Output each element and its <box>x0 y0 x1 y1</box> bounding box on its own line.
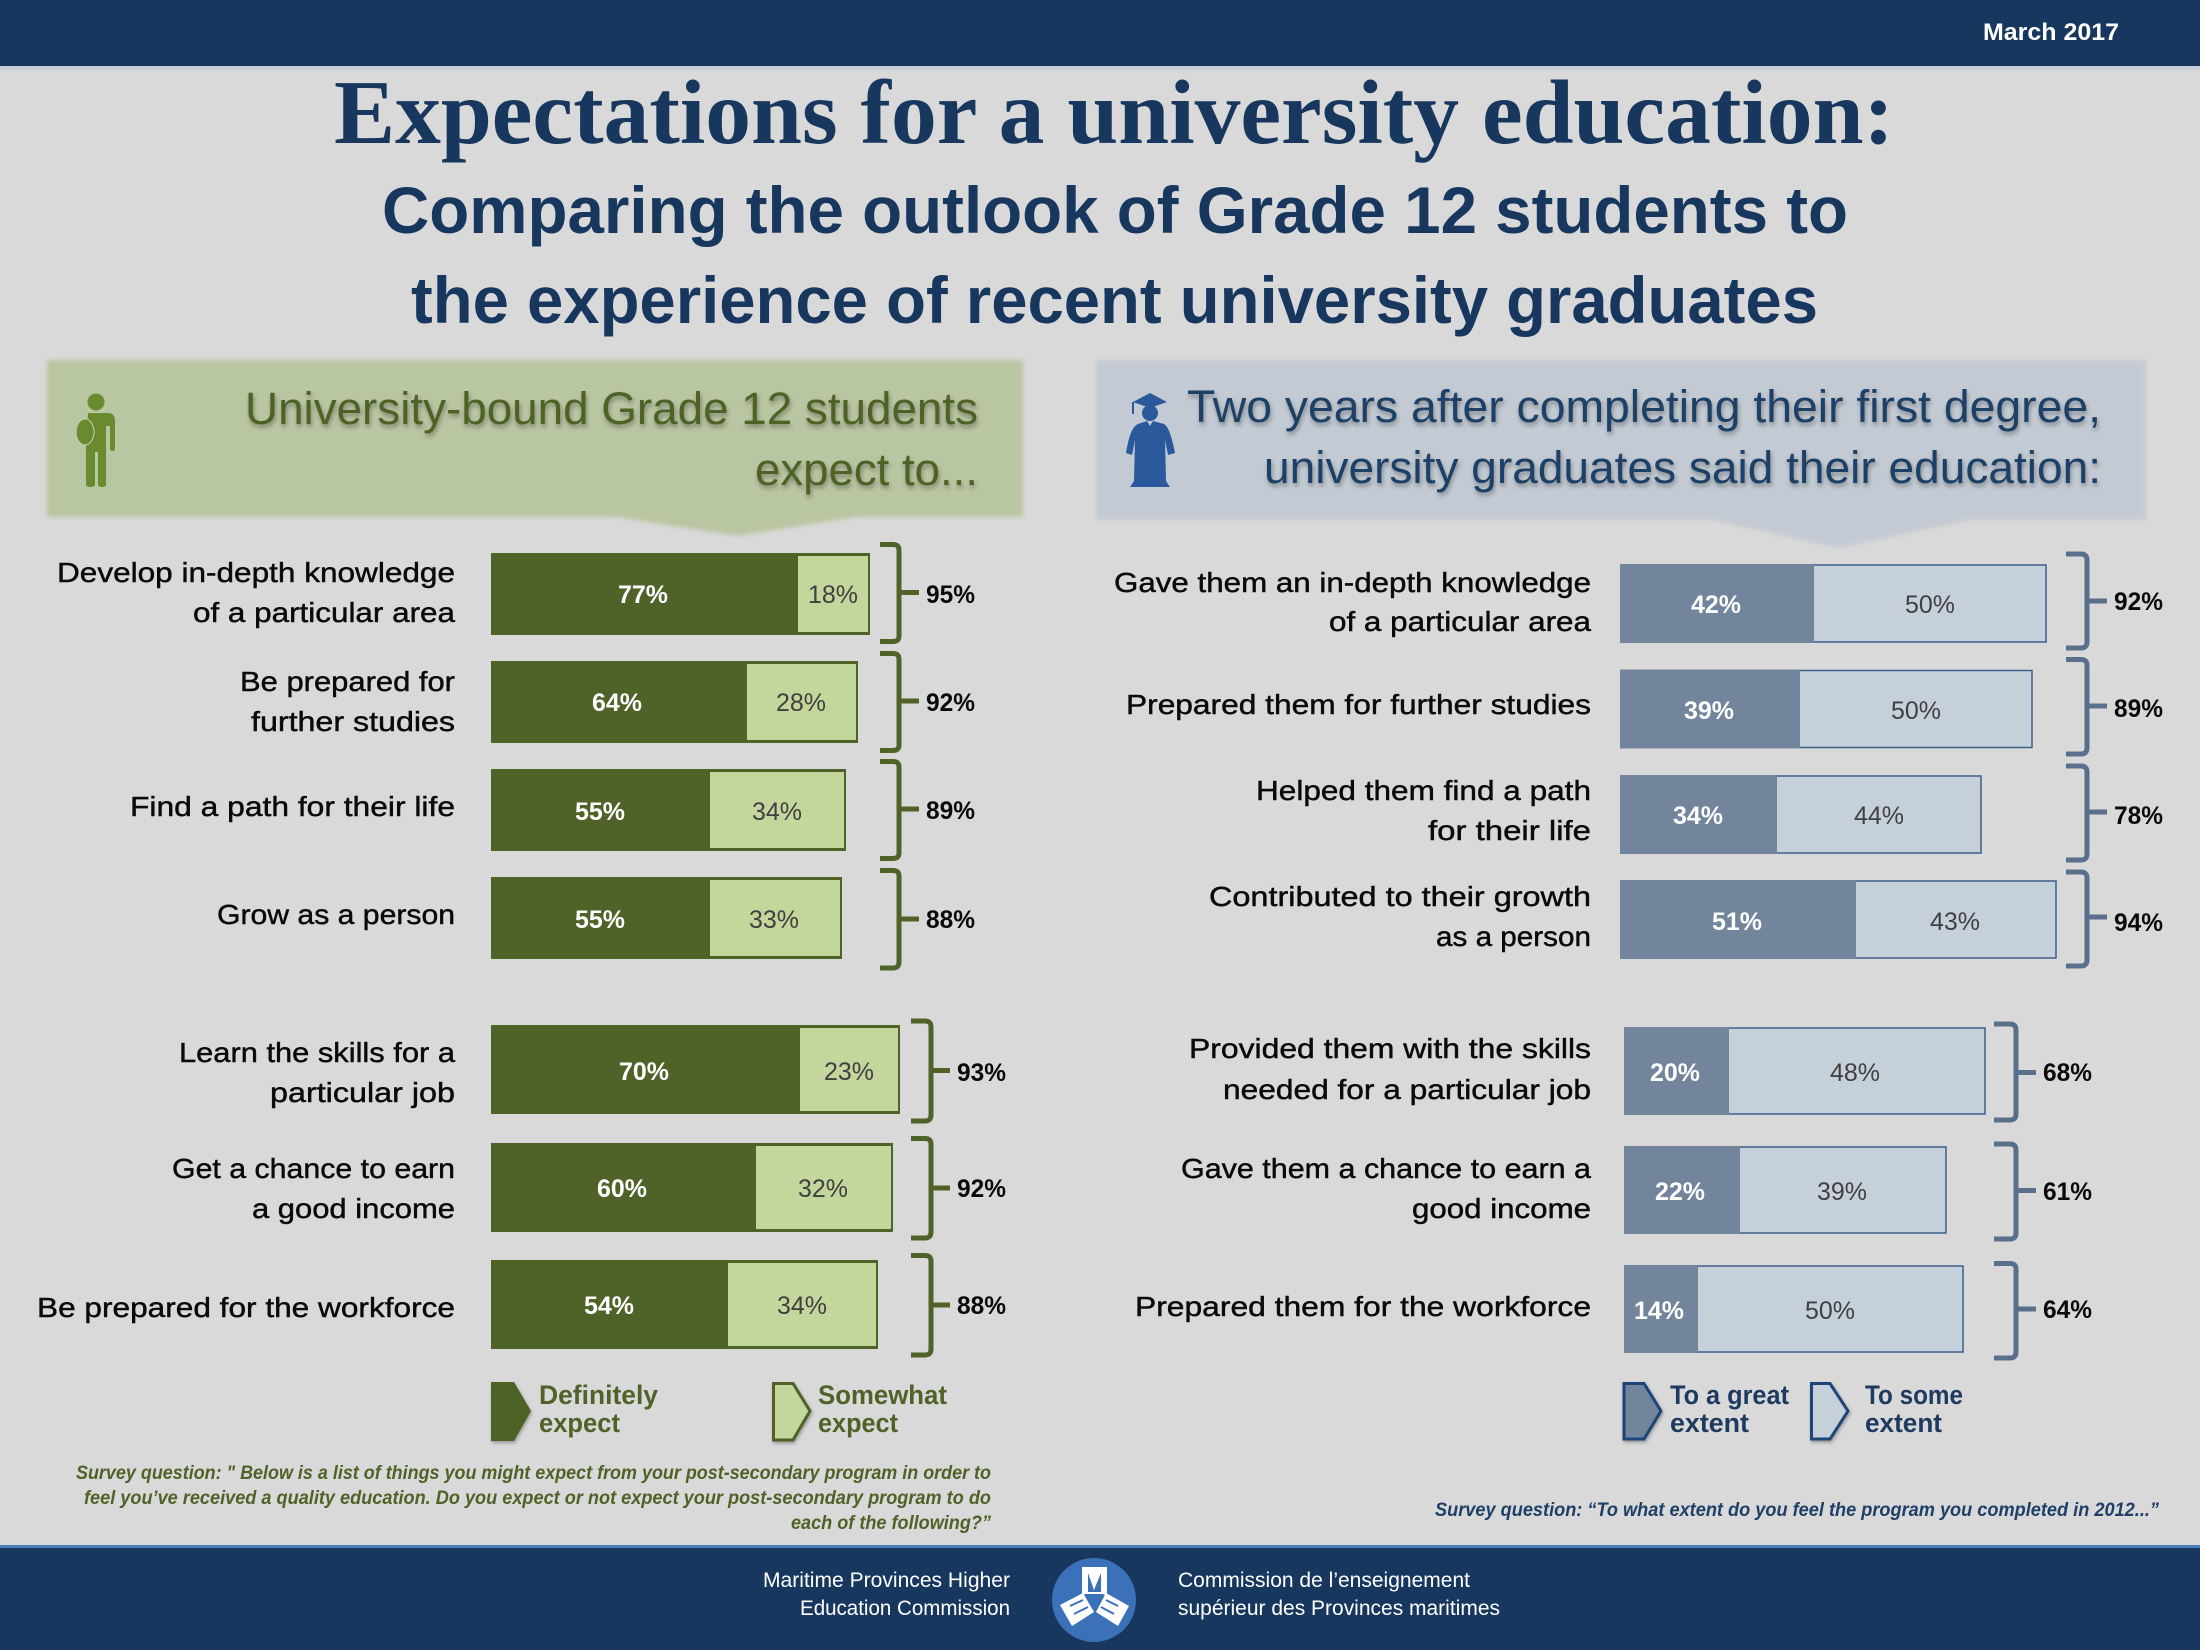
row: good income: 61% <box>2043 1178 2092 1206</box>
top band <box>0 0 2200 70</box>
row: further studies: 92% <box>926 689 975 717</box>
row: workforce: 50% <box>1805 1297 1855 1325</box>
survey question: Grade 12: feel you’ve received a quality education. Do you expect or not expect your post-secondary program to do <box>84 1488 991 1509</box>
row: particular job: 48% <box>1830 1059 1880 1087</box>
row: growth as a person: as a person <box>1436 921 1591 952</box>
row: growth as a person: 51% <box>1712 908 1762 936</box>
icon: student <box>76 394 115 487</box>
banner: Grade 12 students <box>47 360 1023 536</box>
legend: graduates <box>1624 1380 1963 1439</box>
row: further studies <box>1126 660 2163 754</box>
row: in-depth knowledge: 77% <box>618 581 668 609</box>
legend: Grade 12: expect <box>818 1408 898 1438</box>
row: good income: good income <box>1412 1193 1591 1224</box>
row: further studies: 39% <box>1684 697 1734 725</box>
legend: Grade 12 <box>491 1380 947 1441</box>
row: particular job: needed for a particular job <box>1223 1074 1591 1105</box>
row: further studies: Prepared them for further studies <box>1126 689 1591 720</box>
footer text: French: Commission de l’enseignement <box>1178 1569 1470 1592</box>
row: further studies: 64% <box>592 689 642 717</box>
row: grow as a person: Grow as a person <box>217 899 455 930</box>
row: workforce <box>37 1256 1006 1355</box>
banner: university graduates: university graduates said their education: <box>1264 442 2101 493</box>
row: particular job: 93% <box>957 1059 1006 1087</box>
row: particular job <box>1189 1024 2092 1120</box>
legend: graduates: To some <box>1865 1380 1963 1410</box>
footer text: French: supérieur des Provinces maritimes <box>1178 1597 1500 1620</box>
row: path for life: 34% <box>752 798 802 826</box>
row: good income: 32% <box>798 1175 848 1203</box>
footer text: French <box>1178 1569 1500 1620</box>
survey question: Grade 12: each of the following?” <box>791 1513 991 1534</box>
legend: graduates: extent <box>1670 1408 1749 1438</box>
subtitle <box>382 173 1848 337</box>
row: grow as a person: 88% <box>926 906 975 934</box>
subtitle: Comparing the outlook of Grade 12 students to <box>382 173 1848 247</box>
row: particular job: Learn the skills for a <box>179 1037 455 1068</box>
row: path for life: 55% <box>575 798 625 826</box>
footer <box>0 1545 2200 1650</box>
row: good income: a good income <box>252 1193 455 1224</box>
logo <box>1052 1558 1136 1642</box>
row: particular job: 70% <box>619 1058 669 1086</box>
date: March 2017 <box>1983 19 2119 46</box>
row: in-depth knowledge: of a particular area <box>1329 606 1591 637</box>
row: path for life: Find a path for their life <box>130 791 455 822</box>
row: workforce <box>1135 1264 2092 1358</box>
row: particular job: 68% <box>2043 1059 2092 1087</box>
row: grow as a person: 55% <box>575 906 625 934</box>
banner: Grade 12 students: expect to... <box>755 444 978 495</box>
panel: Grade 12 students <box>37 360 1023 1534</box>
row: path for life: 44% <box>1854 802 1904 830</box>
icon: graduate <box>1126 393 1175 487</box>
row: grow as a person: 33% <box>749 906 799 934</box>
row: path for life: Helped them find a path <box>1256 775 1591 806</box>
survey question: graduates: Survey question: “To what extent do you feel the program you completed in 2012...” <box>1435 1500 2159 1521</box>
row: in-depth knowledge: Develop in-depth knowledge <box>57 557 455 588</box>
row: particular job: Provided them with the skills <box>1189 1033 1591 1064</box>
row: workforce: Be prepared for the workforce <box>37 1292 455 1323</box>
row: further studies: 89% <box>2114 695 2163 723</box>
row: growth as a person: 94% <box>2114 909 2163 937</box>
title: Expectations for a university education: <box>334 62 1894 163</box>
row: in-depth knowledge <box>1114 554 2163 648</box>
panel: university graduates <box>1096 360 2163 1521</box>
footer text: English <box>763 1569 1010 1620</box>
legend: graduates: To a great <box>1670 1380 1789 1410</box>
banner: university graduates: Two years after completing their first degree, <box>1187 381 2101 432</box>
row: workforce: 88% <box>957 1292 1006 1320</box>
row: in-depth knowledge: Gave them an in-depth knowledge <box>1114 567 1591 598</box>
row: path for life: 89% <box>926 797 975 825</box>
legend: graduates: extent <box>1865 1408 1942 1438</box>
row: workforce: Prepared them for the workforce <box>1135 1291 1591 1322</box>
row: particular job: particular job <box>270 1077 455 1108</box>
legend: Grade 12: expect <box>539 1408 620 1438</box>
row: path for life <box>1256 766 2163 860</box>
row: good income: 22% <box>1655 1178 1705 1206</box>
row: further studies: Be prepared for <box>240 666 455 697</box>
row: particular job <box>179 1021 1006 1121</box>
row: growth as a person <box>1209 872 2163 966</box>
row: in-depth knowledge: of a particular area <box>193 597 455 628</box>
survey question: Grade 12: Survey question: " Below is a list of things you might expect from your post-secondary program in order to <box>76 1463 991 1484</box>
row: in-depth knowledge: 95% <box>926 581 975 609</box>
row: in-depth knowledge: 92% <box>2114 588 2163 616</box>
row: growth as a person: 43% <box>1930 908 1980 936</box>
footer text: English: Education Commission <box>800 1597 1010 1620</box>
row: path for life: 34% <box>1673 802 1723 830</box>
row: workforce: 14% <box>1634 1297 1684 1325</box>
row: particular job: 20% <box>1650 1059 1700 1087</box>
row: path for life: 78% <box>2114 802 2163 830</box>
subtitle: the experience of recent university graduates <box>411 263 1818 337</box>
row: further studies: further studies <box>251 706 455 737</box>
row: good income: 92% <box>957 1175 1006 1203</box>
row: good income <box>172 1138 1006 1238</box>
row: further studies: 50% <box>1891 697 1941 725</box>
row: workforce: 64% <box>2043 1296 2092 1324</box>
row: path for life: for their life <box>1428 815 1591 846</box>
row: in-depth knowledge <box>57 544 975 642</box>
row: in-depth knowledge: 42% <box>1691 591 1741 619</box>
legend: Grade 12: Definitely <box>539 1380 658 1410</box>
row: particular job: 23% <box>824 1058 874 1086</box>
row: further studies <box>240 654 975 750</box>
row: good income: 39% <box>1817 1178 1867 1206</box>
row: further studies: 28% <box>776 689 826 717</box>
banner: university graduates <box>1096 360 2146 548</box>
row: path for life <box>130 762 975 858</box>
row: good income: Gave them a chance to earn a <box>1181 1153 1591 1184</box>
row: good income: Get a chance to earn <box>172 1153 455 1184</box>
row: workforce: 54% <box>584 1292 634 1320</box>
row: good income: 60% <box>597 1175 647 1203</box>
footer text: English: Maritime Provinces Higher <box>763 1569 1010 1592</box>
row: in-depth knowledge: 50% <box>1905 591 1955 619</box>
row: good income <box>1181 1144 2092 1239</box>
row: workforce: 34% <box>777 1292 827 1320</box>
banner: Grade 12 students: University-bound Grade 12 students <box>245 383 978 434</box>
legend: Grade 12: Somewhat <box>818 1380 947 1410</box>
survey question: Grade 12 <box>76 1463 991 1534</box>
row: in-depth knowledge: 18% <box>808 581 858 609</box>
row: growth as a person: Contributed to their growth <box>1209 881 1591 912</box>
row: grow as a person <box>217 870 975 968</box>
